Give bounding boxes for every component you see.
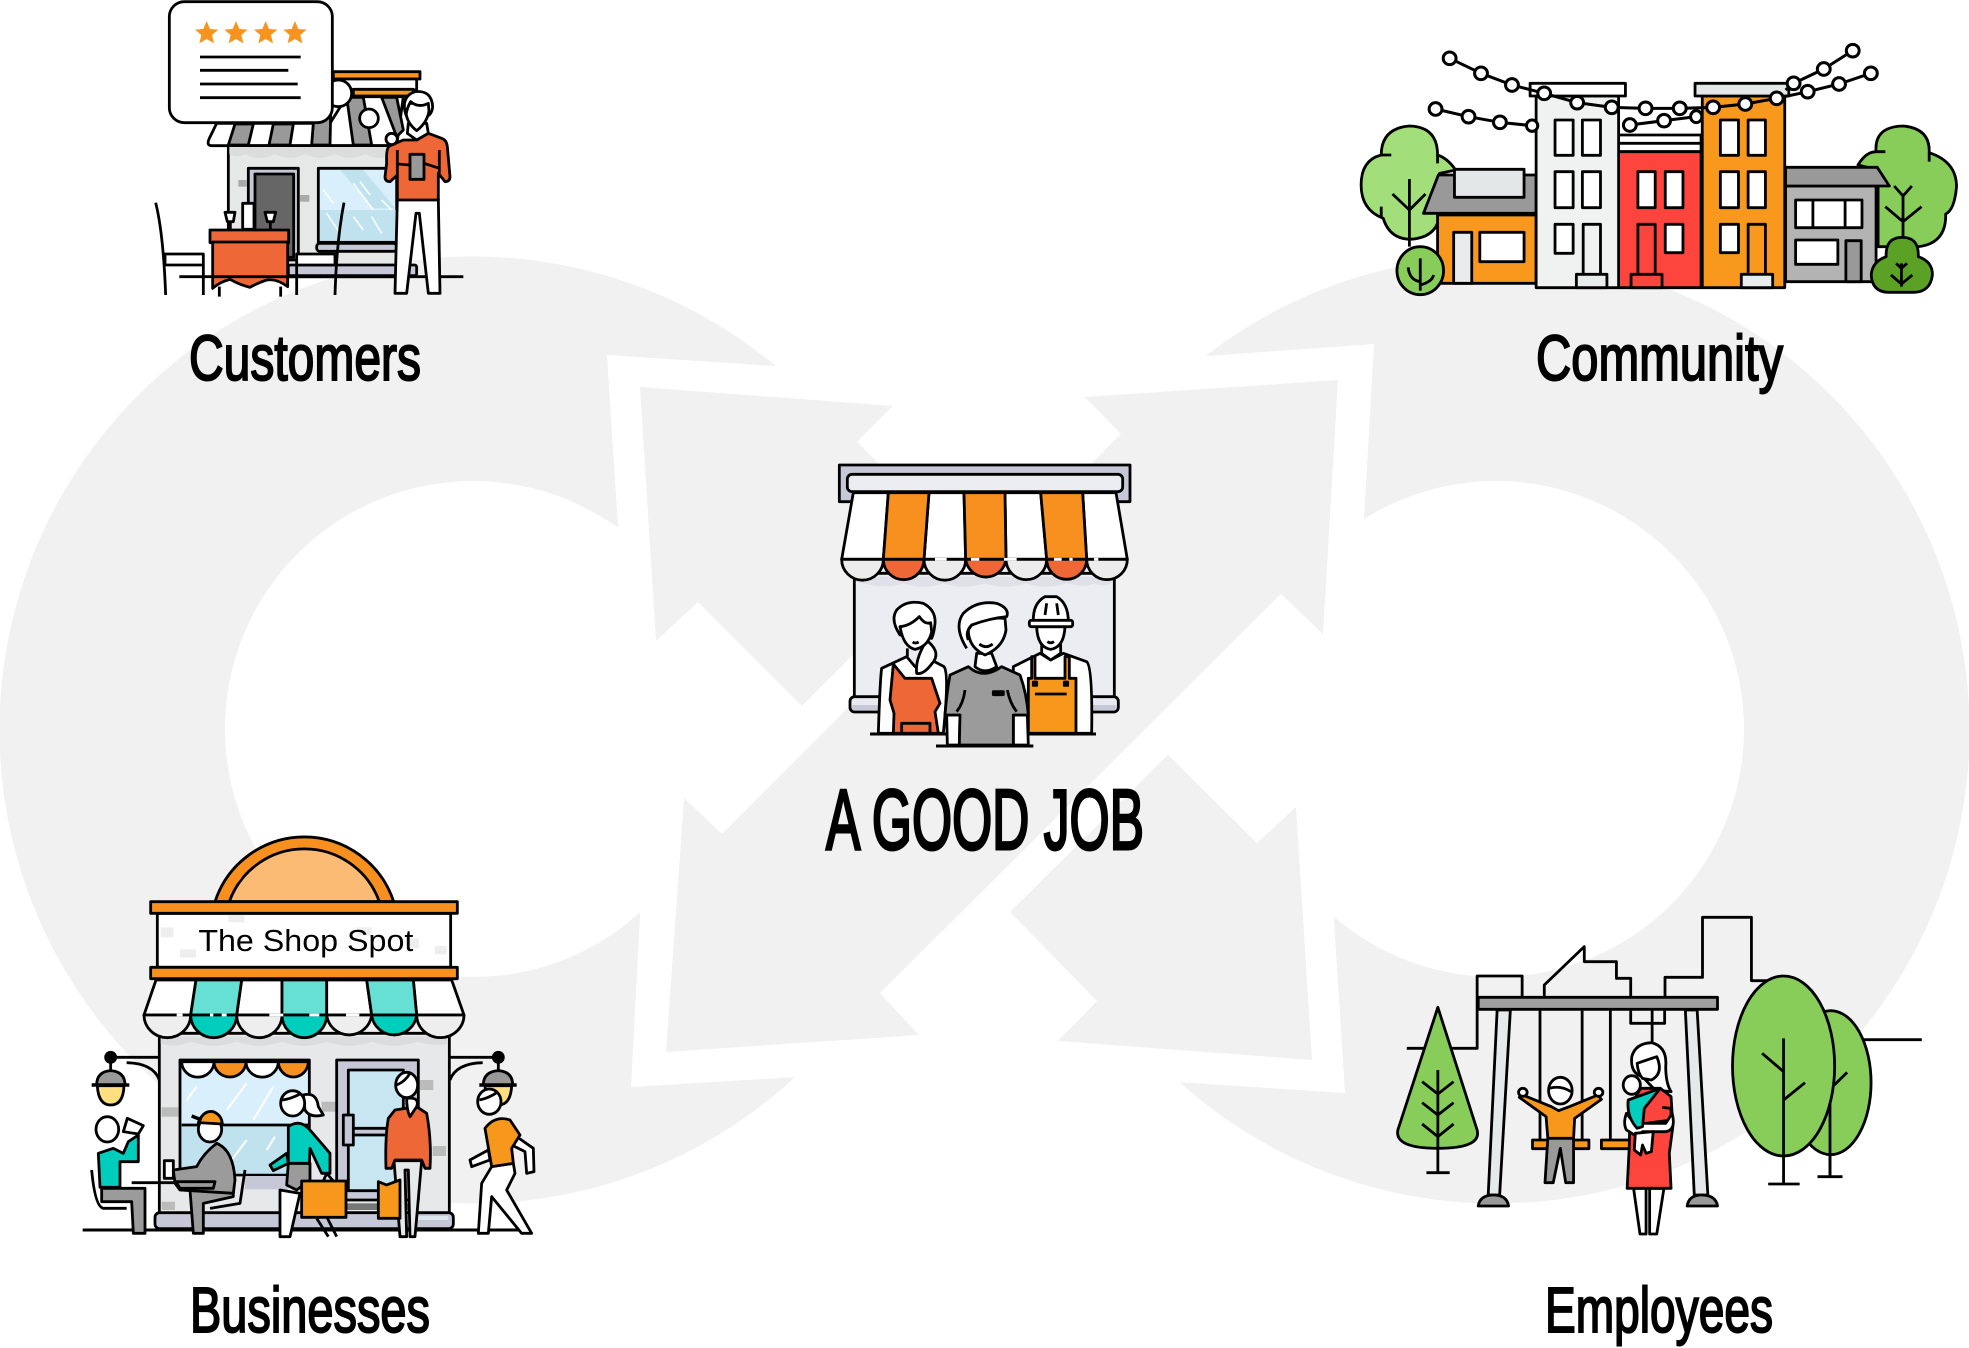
left trees	[1361, 126, 1456, 247]
child on swing	[1519, 1077, 1603, 1183]
street lamp left	[92, 1052, 159, 1105]
strings of lights	[1429, 44, 1877, 131]
shop window	[180, 1060, 309, 1189]
teal striped awning	[144, 980, 464, 1038]
striped awning	[842, 493, 1127, 580]
customer figure with phone	[385, 92, 450, 293]
dome	[215, 837, 394, 902]
arrow: top-right to bottom-left	[666, 380, 1338, 1052]
four orange stars	[195, 21, 307, 43]
shop door	[337, 1060, 418, 1210]
orange tower	[1695, 83, 1789, 288]
person: seated reading	[92, 1117, 145, 1233]
speech bubble with star rating	[169, 2, 397, 145]
label: Employees: Employees	[1545, 1274, 1773, 1346]
person: seated with cap and laptop	[164, 1111, 245, 1233]
icon: bottle and wine glasses	[225, 203, 276, 229]
illustration: storefront with three workers	[839, 465, 1130, 746]
label: Businesses: Businesses	[190, 1274, 430, 1346]
worker: man in hard hat and overalls	[1013, 597, 1092, 733]
illustration: The Shop Spot storefront with people	[83, 837, 534, 1237]
table with red cloth	[210, 230, 289, 297]
illustration: family at a playground	[1398, 917, 1922, 1234]
left house	[1423, 169, 1536, 283]
illustration: customers at a restaurant	[156, 2, 463, 297]
right trees	[1858, 126, 1957, 247]
label: A GOOD JOB: A GOOD JOB	[826, 773, 1144, 868]
street lamp right	[450, 1052, 517, 1105]
person: walking man	[470, 1089, 534, 1233]
skyline outline	[1407, 917, 1922, 1048]
right house	[1786, 167, 1889, 282]
worker: woman in red apron	[878, 602, 947, 733]
white tower	[1530, 83, 1625, 288]
person: woman with shopping bag	[270, 1091, 346, 1237]
arrow: bottom-right head	[1010, 755, 1312, 1060]
swing frame	[1478, 997, 1717, 1206]
chairs	[156, 203, 344, 295]
person: woman in red sweater	[378, 1072, 430, 1237]
dark green bush	[1871, 237, 1932, 292]
twin trees	[1732, 976, 1871, 1184]
mother holding toddler	[1623, 1043, 1673, 1234]
arrow: top-left head	[640, 387, 961, 706]
pine tree	[1398, 1007, 1478, 1173]
background: infinity loop with arrows	[0, 257, 1969, 1204]
label: Customers: Customers	[189, 322, 421, 394]
label: Community: Community	[1536, 322, 1783, 394]
worker: woman in grey shirt	[945, 603, 1028, 745]
small round shrub	[1397, 247, 1444, 295]
illustration: community street	[1361, 44, 1957, 295]
sign board	[151, 902, 457, 979]
red rowhouse	[1619, 135, 1701, 288]
shop name: The Shop Spot	[198, 924, 414, 958]
